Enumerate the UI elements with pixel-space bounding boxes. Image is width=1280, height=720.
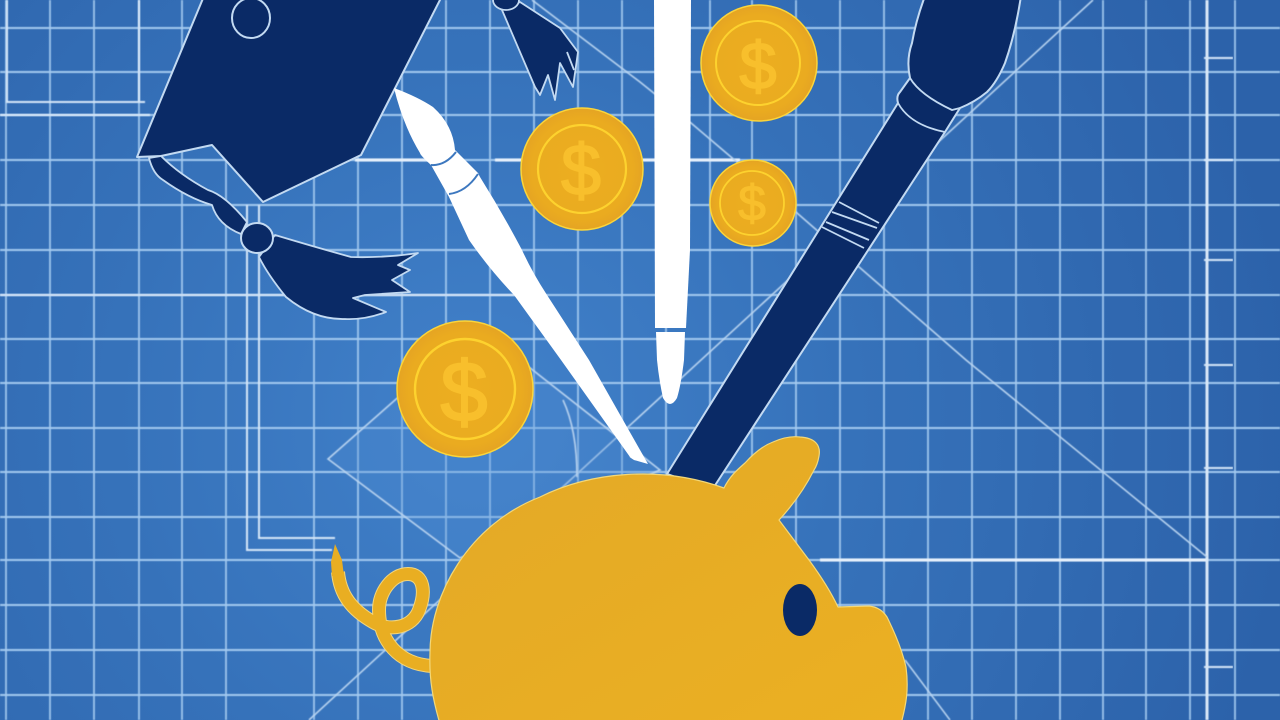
icon: large coin top right: $ [739,29,777,104]
icon: coin centre [521,108,643,230]
icon: small coin [710,160,796,246]
icon: white pen [654,0,691,404]
icon: lower coin: $ [440,345,488,440]
cap cord [149,156,247,234]
cap button [232,0,270,38]
icon: navy paintbrush [667,0,1021,490]
cap tassel [259,235,418,319]
pig body [430,437,907,720]
icon: white paintbrush [394,88,648,464]
icon: large coin top right [701,5,817,121]
icon: second tassel [493,0,578,100]
cap board [137,0,442,202]
pig tail [331,544,432,666]
pig eye [783,584,817,636]
icon: coin centre: $ [561,131,601,211]
icon: piggy bank [331,437,907,720]
icon: lower coin [397,321,533,457]
icon: graduation cap [137,0,442,319]
cap knot [241,223,273,253]
icon: small coin: $ [738,175,766,231]
